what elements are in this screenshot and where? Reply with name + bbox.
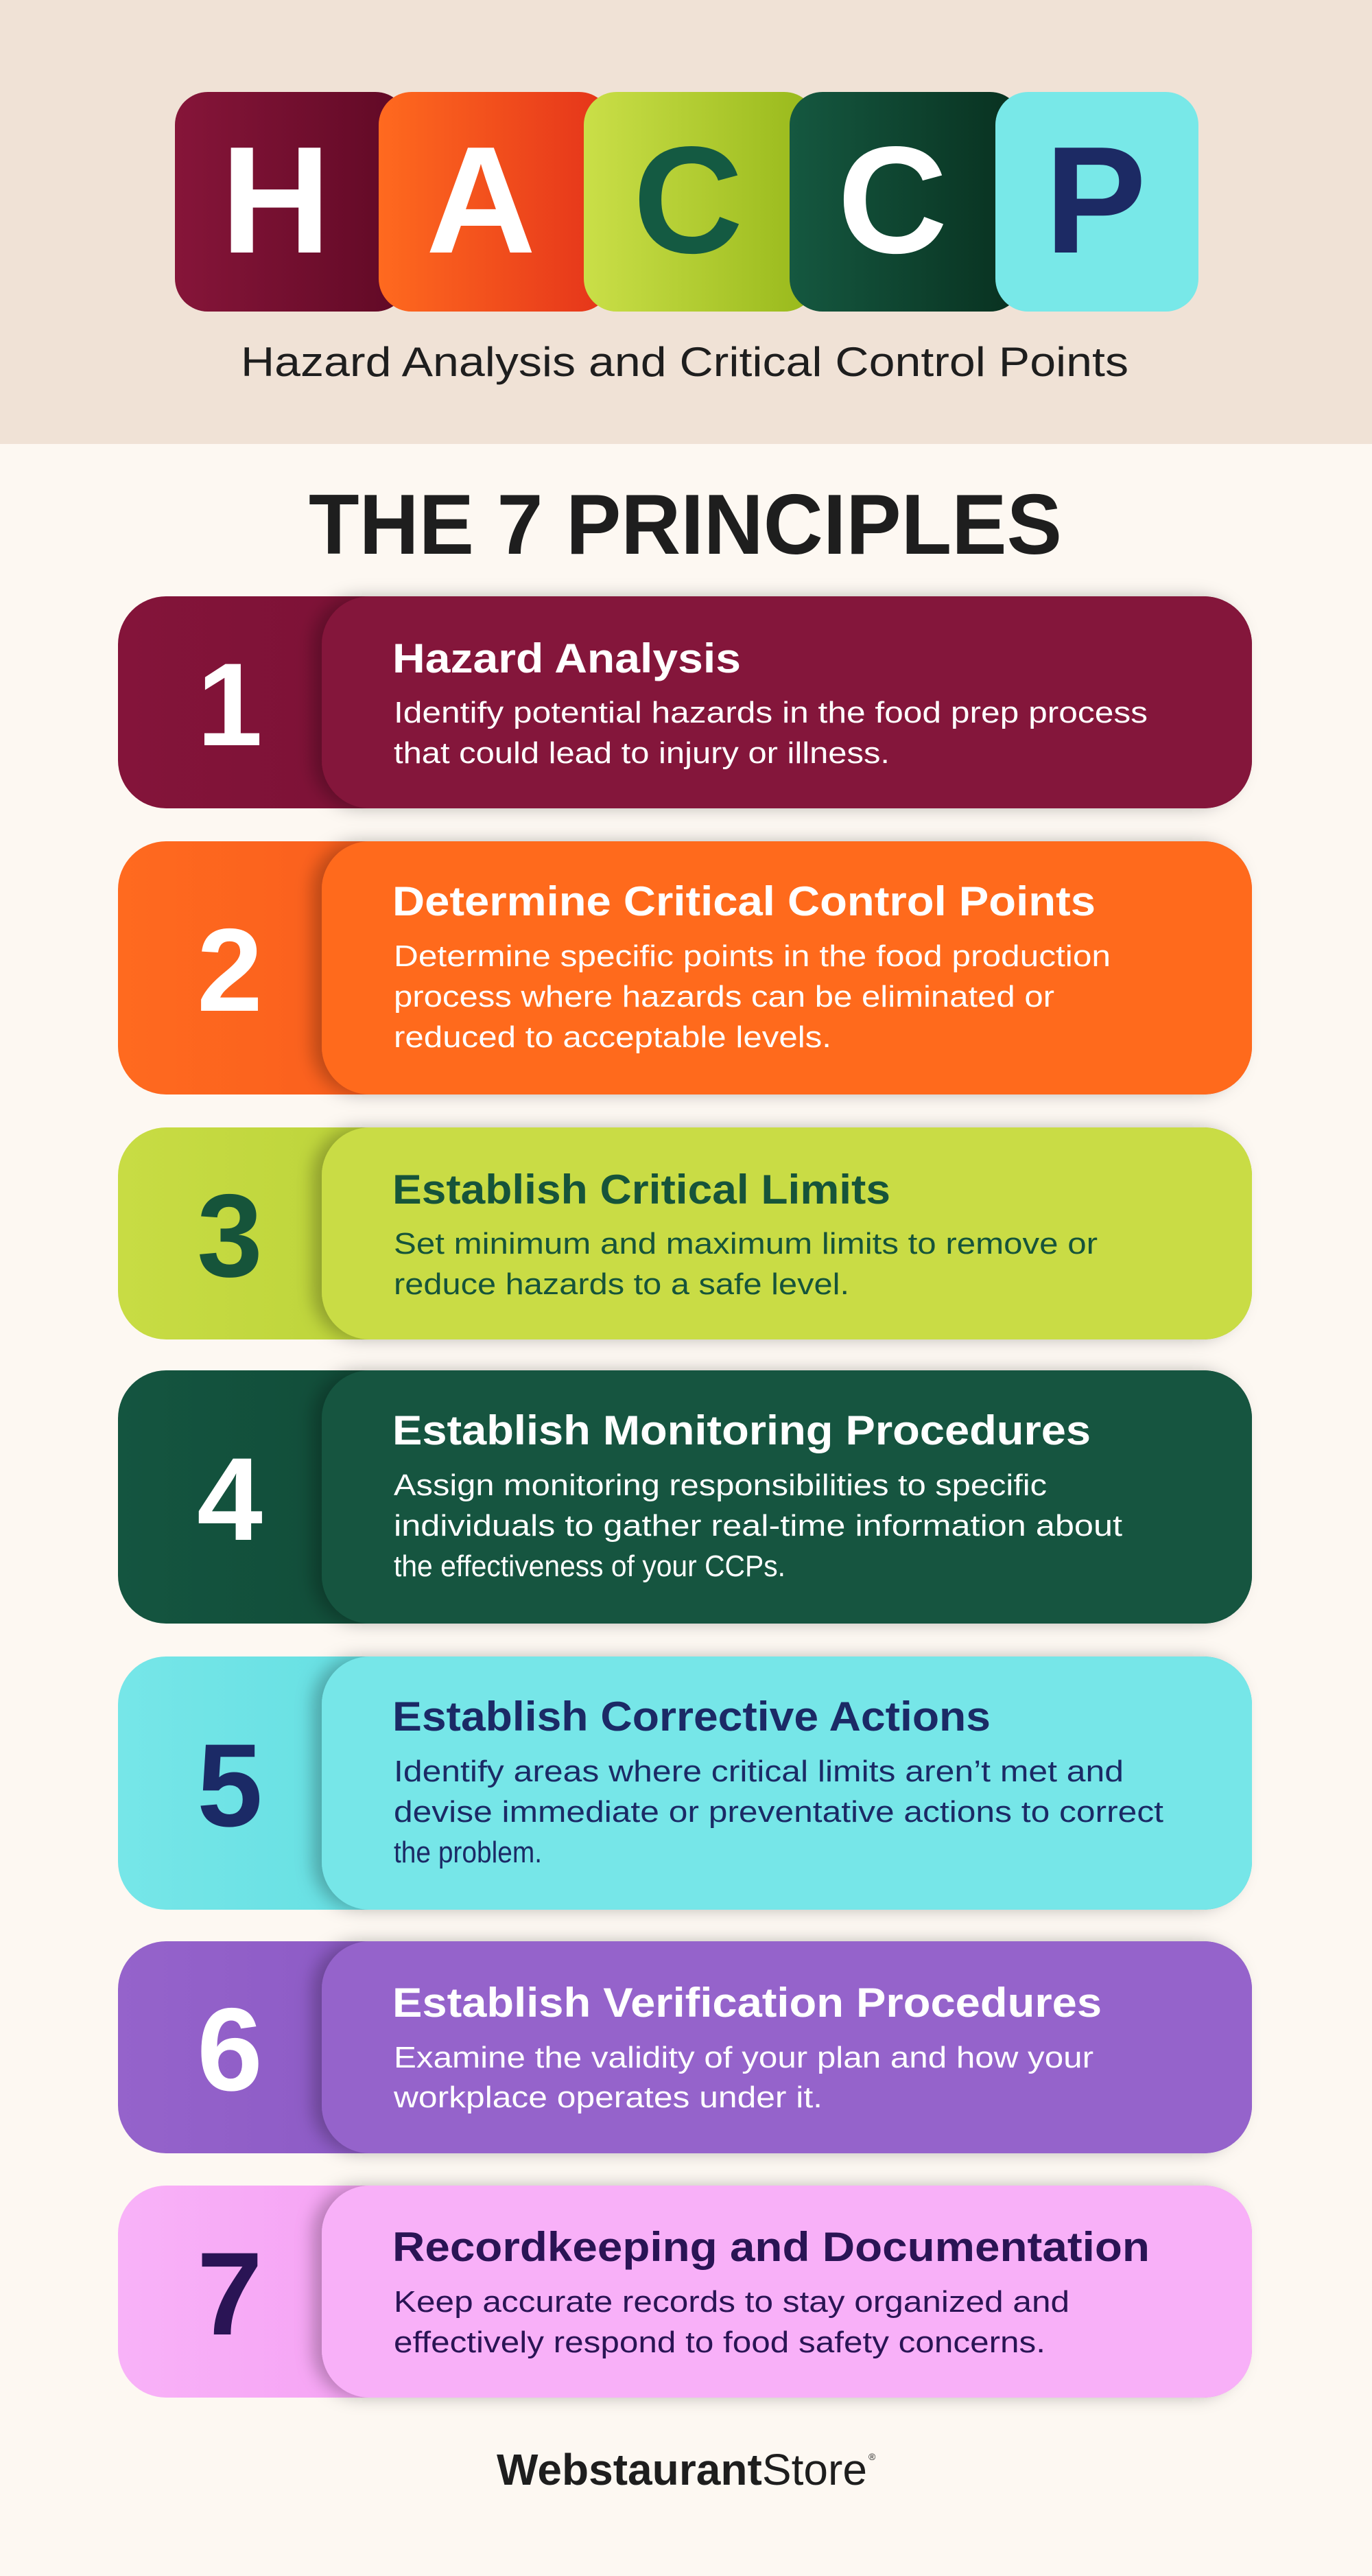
card 3: Establish Critical Limits: 3	[197, 1170, 263, 1302]
card 7: Recordkeeping and Documentation: 7	[197, 2228, 263, 2360]
card 4: Establish Monitoring Procedures: Assign monitoring responsibilities to specific	[394, 1468, 1047, 1502]
card 3: Establish Critical Limits: Establish Critical Limits	[392, 1167, 890, 1213]
card 2: Determine Critical Control Points: process where hazards can be eliminated or	[394, 980, 1054, 1014]
card 5: Establish Corrective Actions: 5	[197, 1720, 263, 1851]
card 2: Determine Critical Control Points: 2	[197, 904, 263, 1036]
card 5: Establish Corrective Actions	[118, 1656, 1252, 1910]
card 6: Establish Verification Procedures: Examine the validity of your plan and how your	[394, 2041, 1093, 2074]
card 7: Recordkeeping and Documentation: effectively respond to food safety concerns.	[394, 2326, 1045, 2359]
card 5: Establish Corrective Actions: the problem.	[394, 1836, 542, 1869]
card 2: Determine Critical Control Points: Determine Critical Control Points	[392, 878, 1096, 924]
HACCP letter blocks	[175, 92, 1198, 312]
logo: WebstaurantStore: WebstaurantStore	[497, 2445, 867, 2494]
card 6: Establish Verification Procedures: workplace operates under it.	[393, 2081, 823, 2114]
card 4: Establish Monitoring Procedures: the effectiveness of your CCPs.	[394, 1549, 785, 1583]
card 4: Establish Monitoring Procedures: 4	[197, 1433, 263, 1565]
card 6: Establish Verification Procedures: Establish Verification Procedures	[392, 1980, 1102, 2026]
card 4: Establish Monitoring Procedures: individuals to gather real-time information about	[394, 1509, 1122, 1543]
card 3: Establish Critical Limits: reduce hazards to a safe level.	[394, 1267, 849, 1301]
card 5: Establish Corrective Actions: Establish Corrective Actions	[392, 1694, 991, 1740]
HACCP letter blocks: P	[1045, 115, 1146, 285]
card 1: Hazard Analysis	[118, 596, 1252, 808]
card 2: Determine Critical Control Points: reduced to acceptable levels.	[394, 1020, 831, 1054]
HACCP letter blocks: H	[221, 115, 331, 285]
card 7: Recordkeeping and Documentation: Keep accurate records to stay organized and	[394, 2285, 1069, 2319]
card 3: Establish Critical Limits	[118, 1127, 1252, 1339]
header background	[0, 0, 1372, 444]
card 4: Establish Monitoring Procedures	[118, 1370, 1252, 1624]
HACCP letter blocks: A	[426, 115, 536, 285]
card 6: Establish Verification Procedures: 6	[197, 1984, 263, 2116]
card 2: Determine Critical Control Points	[118, 841, 1252, 1094]
card 2: Determine Critical Control Points: Determine specific points in the food production	[394, 939, 1111, 973]
card 5: Establish Corrective Actions: devise immediate or preventative actions to correct	[394, 1795, 1163, 1829]
subtitle: Hazard Analysis and Critical Control Points	[241, 339, 1128, 385]
card 6: Establish Verification Procedures	[118, 1941, 1252, 2153]
card 3: Establish Critical Limits: Set minimum and maximum limits to remove or	[394, 1227, 1098, 1261]
card 1: Hazard Analysis: 1	[197, 639, 263, 771]
title: THE 7 PRINCIPLES	[309, 478, 1062, 572]
HACCP letter blocks: C	[838, 115, 947, 285]
card 1: Hazard Analysis: that could lead to injury or illness.	[394, 736, 890, 770]
card 1: Hazard Analysis: Identify potential hazards in the food prep process	[394, 696, 1148, 729]
card 4: Establish Monitoring Procedures: Establish Monitoring Procedures	[392, 1407, 1091, 1453]
card 7: Recordkeeping and Documentation	[118, 2186, 1252, 2398]
card 1: Hazard Analysis: Hazard Analysis	[392, 635, 741, 681]
logo: WebstaurantStore: ®	[868, 2451, 876, 2462]
card 7: Recordkeeping and Documentation: Recordkeeping and Documentation	[392, 2224, 1150, 2270]
HACCP letter blocks: C	[633, 115, 743, 285]
card 5: Establish Corrective Actions: Identify areas where critical limits aren’t met and	[394, 1755, 1124, 1788]
